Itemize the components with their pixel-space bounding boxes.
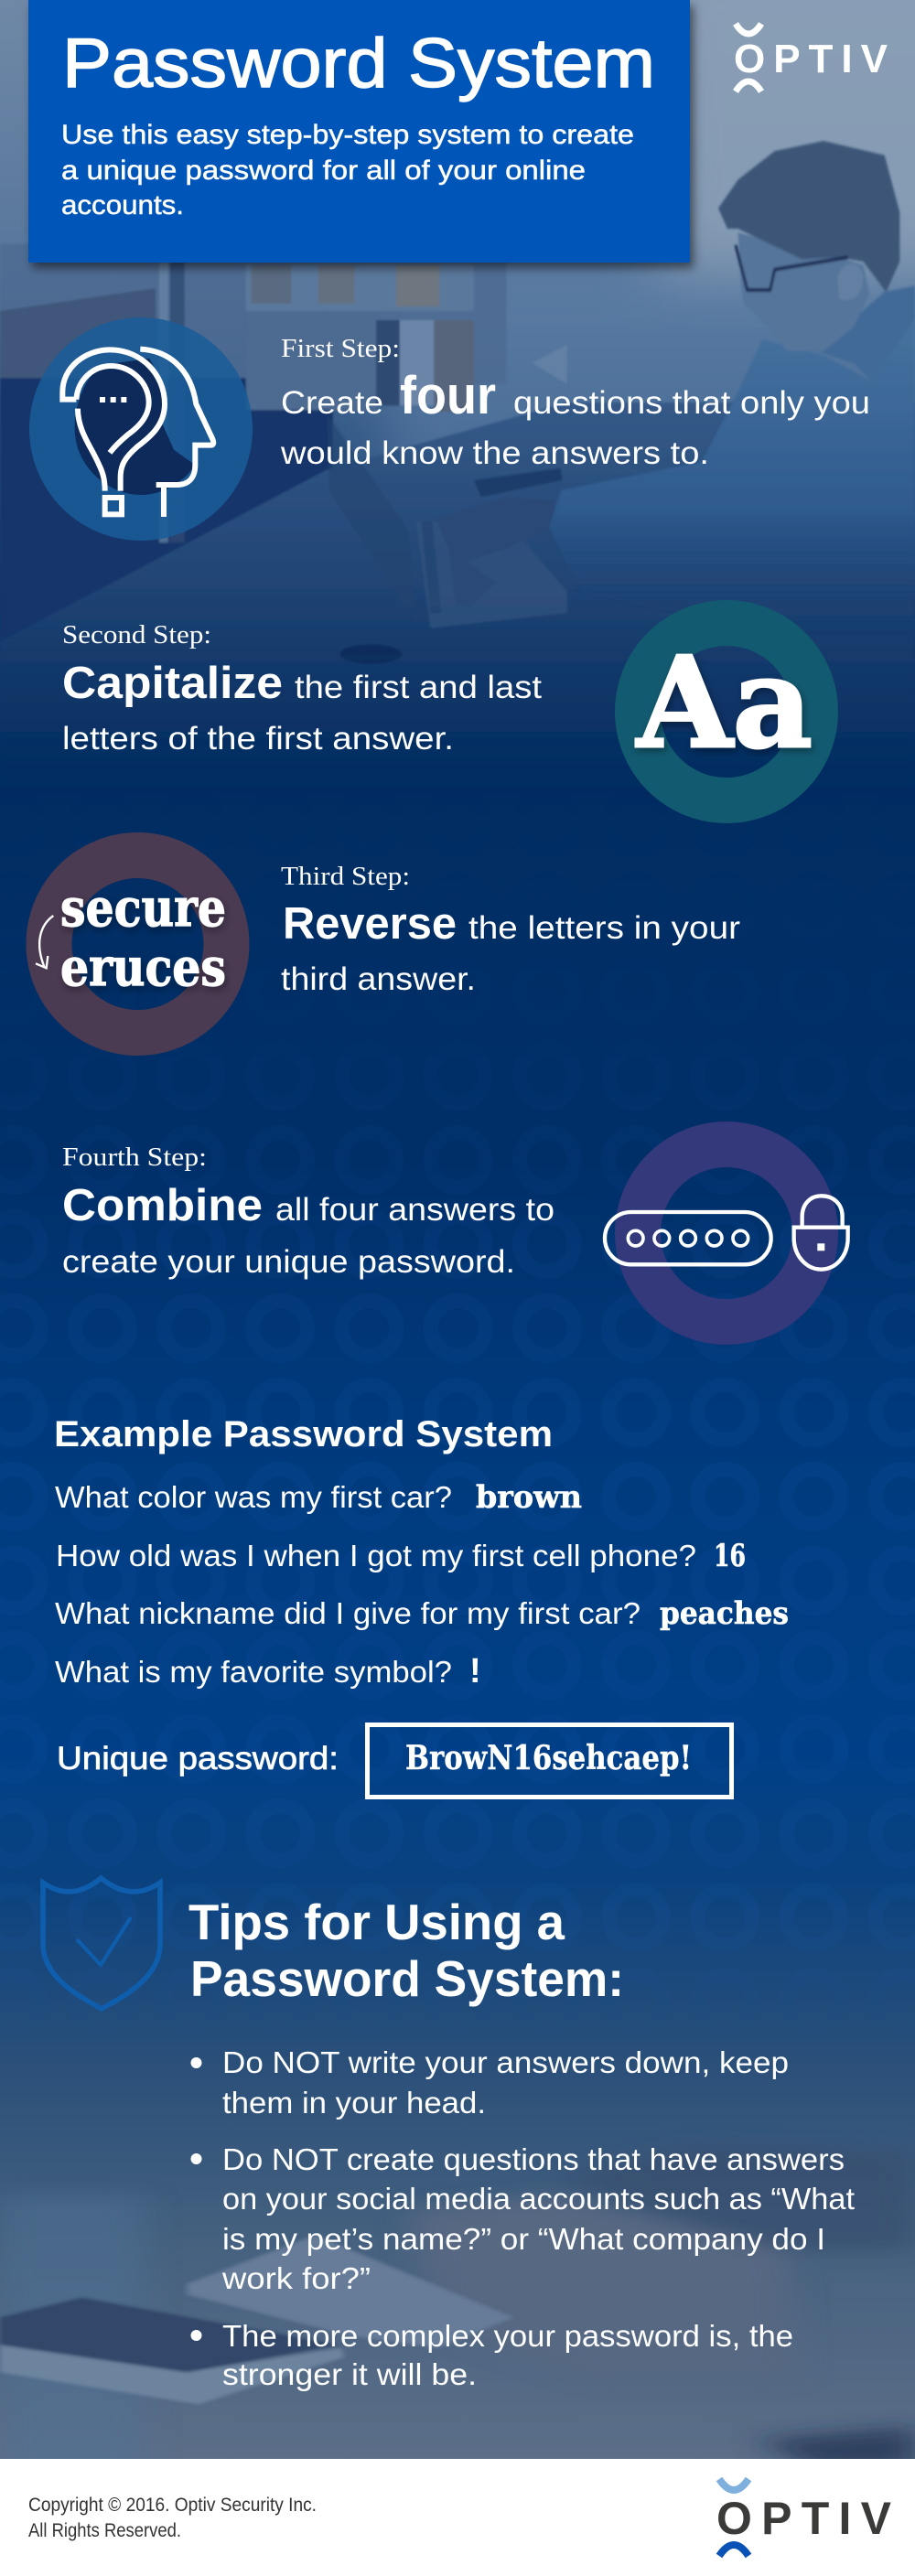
unique password: BrowN16sehcaep!	[405, 1739, 692, 1777]
arrow: reverse	[36, 916, 53, 968]
example password system: How old was I when I got my first cell phone?	[56, 1539, 696, 1572]
example password system: 16	[714, 1538, 746, 1574]
step 4 text: all four answers to	[275, 1192, 554, 1228]
tips list	[190, 2045, 855, 2391]
example heading: Example Password System	[54, 1414, 553, 1454]
step 4 text: Combine	[62, 1181, 263, 1230]
step 1 text: Create	[281, 385, 383, 421]
intro text	[61, 120, 634, 220]
header panel	[28, 0, 690, 263]
example password system: What is my favorite symbol?	[55, 1655, 452, 1689]
example password system: brown	[476, 1479, 582, 1516]
step 3 icon: secure reversed ring: secure	[60, 877, 226, 939]
step 4 text: create your unique password.	[62, 1244, 515, 1280]
office background photo	[0, 244, 915, 805]
step 3 icon: secure reversed ring: eruces	[60, 937, 226, 998]
step 1 text: would know the answers to.	[280, 435, 709, 471]
logo: Optiv white: OPTIV	[734, 37, 888, 81]
intro text: Use this easy step-by-step system to create	[61, 120, 634, 150]
logo: Optiv colour	[716, 2479, 892, 2556]
step 1 text	[280, 334, 870, 471]
step 3 text: Reverse	[283, 899, 457, 949]
step 3 text	[281, 862, 740, 997]
intro text: accounts.	[61, 190, 184, 220]
example password system: peaches	[660, 1595, 789, 1632]
step 2 text: letters of the first answer.	[62, 721, 454, 757]
tips list: stronger it will be.	[222, 2357, 477, 2391]
tips heading: Password System:	[190, 1950, 624, 2007]
step 4 text: Fourth Step:	[62, 1143, 207, 1172]
unique password: Unique password:	[57, 1741, 339, 1776]
tips list: Do NOT write your answers down, keep	[222, 2045, 789, 2079]
example password system: What color was my first car?	[55, 1480, 452, 1514]
example password system	[54, 1414, 789, 1797]
step 2 icon: Aa ring: Aa	[635, 629, 813, 777]
ring pattern	[0, 778, 915, 2058]
step 3 text: the letters in your	[468, 910, 740, 946]
tips list: is my pet’s name?” or “What company do I	[222, 2222, 825, 2256]
example password system: What nickname did I give for my first car?	[55, 1596, 640, 1630]
man at laptop photo	[549, 141, 915, 637]
logo: Optiv white	[734, 24, 888, 91]
step 2 text: Second Step:	[62, 620, 211, 649]
tips heading	[188, 1894, 624, 2007]
step 1 text: questions that only you	[513, 385, 870, 421]
tips list: work for?”	[221, 2261, 371, 2295]
step 3 text: Third Step:	[281, 862, 410, 891]
step 4 icon: password field and padlock	[605, 1144, 848, 1322]
step 2 text: Capitalize	[62, 659, 283, 708]
tips list: on your social media accounts such as “What	[222, 2182, 855, 2216]
logo: Optiv colour: OPTIV	[716, 2493, 892, 2544]
footer	[0, 2459, 915, 2576]
copyright	[28, 2495, 317, 2541]
step 2 text	[62, 620, 542, 757]
step 3 text: third answer.	[281, 961, 476, 997]
tips heading: Tips for Using a	[188, 1894, 565, 1950]
step 3 icon: secure reversed ring	[36, 855, 226, 1033]
title: Password System	[62, 25, 655, 102]
step 4 text	[62, 1143, 554, 1280]
copyright: Copyright © 2016. Optiv Security Inc.	[28, 2495, 317, 2516]
keyboard and phone photo	[0, 2143, 915, 2470]
step 1 text: First Step:	[281, 334, 400, 363]
wall light wash	[384, 0, 915, 540]
intro text: a unique password for all of your online	[61, 156, 586, 186]
icon: shield with check	[43, 1878, 160, 2009]
tips list: Do NOT create questions that have answers	[222, 2142, 845, 2176]
copyright: All Rights Reserved.	[28, 2520, 181, 2541]
tips list: them in your head.	[222, 2086, 486, 2120]
unique password	[57, 1725, 732, 1797]
step 1 text: four	[400, 366, 496, 425]
tips list: The more complex your password is, the	[222, 2319, 793, 2353]
step 2 text: the first and last	[295, 670, 542, 705]
step 1 icon: head with question mark	[29, 317, 253, 541]
example password system: !	[469, 1652, 481, 1690]
